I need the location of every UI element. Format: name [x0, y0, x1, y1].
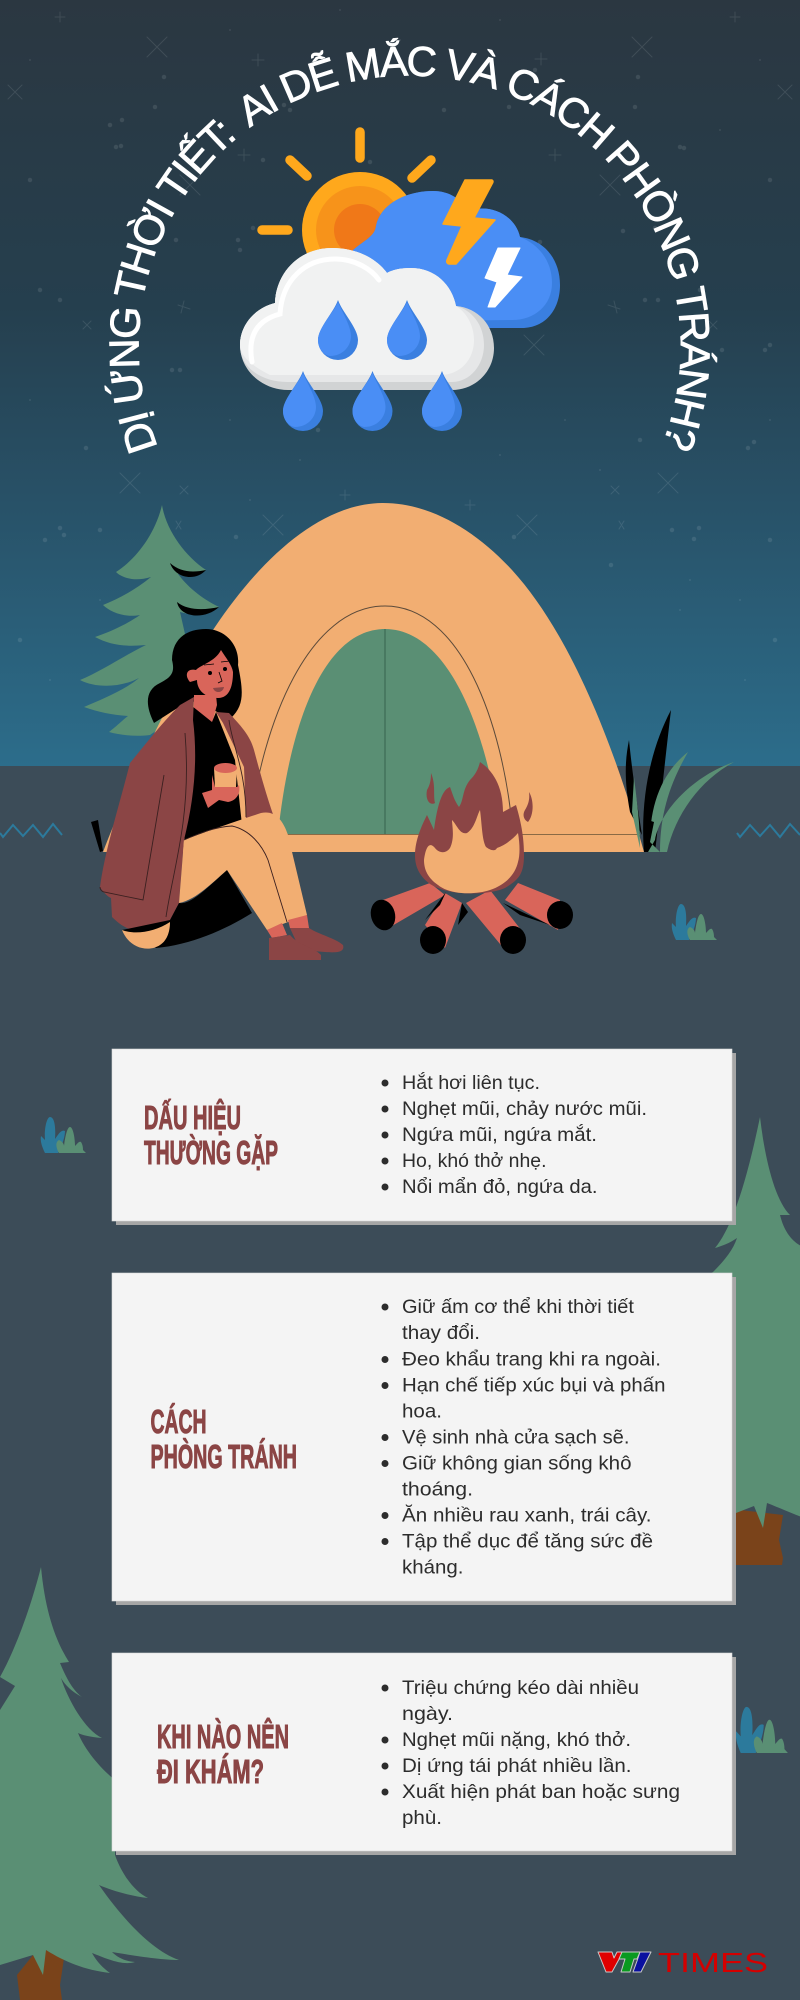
icon: orange lightning bolt [443, 180, 495, 264]
icon: blue storm cloud [353, 191, 560, 328]
icon: white rain cloud [240, 248, 494, 390]
heading: signs: THƯỜNG GẶP [144, 1134, 278, 1171]
list: when to see a doctor: Xuất hiện phát ban hoặc sưng [402, 1781, 680, 1803]
grass beside tent [626, 710, 734, 852]
tree bottom left [0, 1567, 179, 2000]
panel: when to see a doctor [112, 1653, 736, 1855]
list: prevention: Vệ sinh nhà cửa sạch sẽ. [402, 1426, 630, 1448]
logo text: TIMES [658, 1947, 768, 1978]
list: signs: Hắt hơi liên tục. [402, 1071, 540, 1094]
list: prevention: Giữ không gian sống khô [402, 1452, 632, 1474]
list: prevention: Giữ ấm cơ thể khi thời tiết [402, 1296, 635, 1318]
list: signs: Ho, khó thở nhẹ. [402, 1150, 546, 1172]
campfire [367, 762, 573, 954]
zigzag left [0, 824, 62, 837]
heading: prevention [150, 1403, 297, 1475]
left grass stub [91, 820, 103, 852]
list: prevention [385, 1296, 666, 1578]
logo mark [598, 1952, 651, 1972]
tent arch line [249, 606, 513, 834]
icon: white lightning bolt [485, 248, 522, 307]
stars [8, 10, 792, 680]
coat [100, 697, 274, 932]
flame inner [424, 810, 520, 893]
bush left [41, 1117, 86, 1153]
heading: when to see a doctor: ĐI KHÁM? [157, 1753, 264, 1790]
pants [179, 812, 307, 930]
list: prevention: thay đổi. [402, 1322, 480, 1344]
tent door [278, 629, 501, 834]
list: when to see a doctor: Triệu chứng kéo dài nhiều [402, 1677, 639, 1699]
shirt [184, 706, 242, 845]
hair [148, 629, 242, 723]
bush right [736, 1707, 788, 1753]
night sky background [0, 0, 800, 766]
log seat [122, 870, 252, 949]
zigzag right [737, 824, 800, 837]
tree behind tent [80, 505, 219, 736]
tree right [700, 1117, 800, 1565]
icon: sun rays [262, 132, 431, 230]
list: prevention: hoa. [402, 1400, 442, 1422]
list: prevention: Ăn nhiều rau xanh, trái cây. [402, 1504, 652, 1526]
heading: when to see a doctor: KHI NÀO NÊN [157, 1718, 289, 1755]
panel: prevention [112, 1273, 736, 1605]
woman sitting [100, 629, 343, 960]
neck [194, 695, 217, 723]
flame outer [415, 762, 524, 894]
heading: signs: DẤU HIỆU [144, 1099, 241, 1136]
list: when to see a doctor: phù. [402, 1807, 442, 1829]
list: prevention: Tập thể dục để tăng sức đề [402, 1530, 653, 1552]
shoes [269, 928, 343, 960]
tent [103, 503, 644, 852]
ground [0, 766, 800, 2000]
list: signs: Nghẹt mũi, chảy nước mũi. [402, 1098, 647, 1120]
list: when to see a doctor: Nghẹt mũi nặng, khó thở. [402, 1729, 631, 1751]
panel: signs [112, 1049, 736, 1225]
list: signs: Ngứa mũi, ngứa mắt. [402, 1123, 597, 1146]
list: signs [385, 1071, 647, 1198]
list: when to see a doctor: Dị ứng tái phát nhiều lần. [402, 1755, 632, 1777]
list: prevention: Đeo khẩu trang khi ra ngoài. [402, 1348, 661, 1370]
small flames [427, 773, 533, 822]
list: prevention: thoáng. [402, 1478, 473, 1500]
heading: when to see a doctor [157, 1718, 289, 1790]
logs [367, 883, 573, 954]
socks [267, 915, 309, 938]
list: when to see a doctor: ngày. [402, 1703, 453, 1725]
logo: VTV Times [598, 1947, 768, 1978]
heading: signs [144, 1099, 278, 1171]
icon: sun, clouds, lightning and rain [240, 132, 560, 431]
face [187, 650, 233, 698]
heading: prevention: PHÒNG TRÁNH [150, 1438, 297, 1475]
icon: raindrops [283, 300, 462, 431]
heading: prevention: CÁCH [150, 1403, 206, 1440]
list: prevention: kháng. [402, 1556, 464, 1578]
icon: sun [302, 172, 418, 288]
bush middle [672, 904, 717, 940]
list: prevention: Hạn chế tiếp xúc bụi và phấn [402, 1374, 666, 1396]
list: signs: Nổi mẩn đỏ, ngứa da. [402, 1176, 598, 1198]
list: when to see a doctor [385, 1677, 680, 1829]
title curved: DỊ ỨNG THỜI TIẾT: AI DỄ MẮC VÀ CÁCH PHÒNG TRÁNH? [104, 38, 718, 454]
cup and hand [202, 763, 239, 808]
